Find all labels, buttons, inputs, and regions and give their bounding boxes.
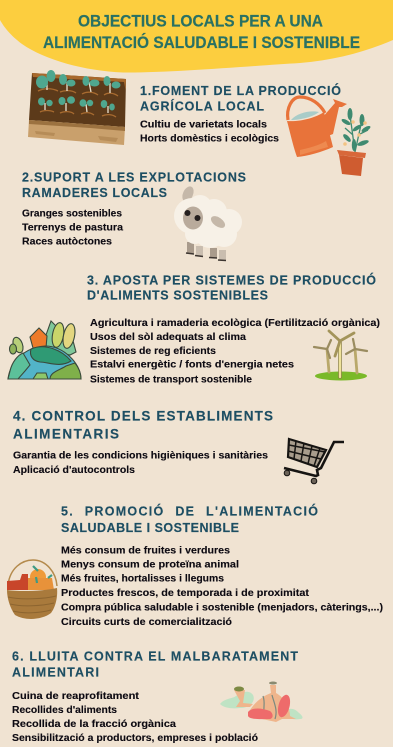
heading: section 3: D'ALIMENTS SOSTENIBLES <box>87 288 268 302</box>
heading: section 4 <box>13 409 273 442</box>
icon: globe with house and trees <box>8 321 81 379</box>
heading: section 2: 2.SUPORT A LES EXPLOTACIONS <box>22 171 246 185</box>
text: section 1 list: Horts domèstics i ecològics <box>140 134 279 145</box>
text: section 1 list <box>140 120 279 145</box>
text: section 2 list: Granges sostenibles <box>22 209 122 220</box>
text: section 5 list: Circuits curts de comercialització <box>61 617 232 628</box>
heading: section 5 <box>61 503 318 535</box>
text: section 5 list: Menys consum de proteïna animal <box>61 560 239 571</box>
icon: wind turbines <box>314 331 367 380</box>
text: section 4 list: Garantia de les condicions higièniques i sanitàries <box>13 451 268 462</box>
text: section 3 list: Agricultura i ramaderia ecològica (Fertilització orgànica) <box>90 318 380 329</box>
heading: section 6: 6. LLUITA CONTRA EL MALBARATAMENT <box>12 650 298 664</box>
heading: section 3: 3. APOSTA PER SISTEMES DE PRODUCCIÓ <box>87 273 376 288</box>
icon: shopping cart <box>284 439 344 484</box>
header banner <box>0 0 393 73</box>
text: section 5 list: Productes frescos, de temporada i de proximitat <box>61 588 310 599</box>
text: section 6 list: Recollides d'aliments <box>12 705 117 716</box>
heading: section 3 <box>87 273 376 302</box>
text: section 3 list: Sistemes de reg eficients <box>90 346 216 357</box>
heading: section 1: 1.FOMENT DE LA PRODUCCIÓ <box>140 83 341 98</box>
text: section 4 list: Aplicació d'autocontrols <box>13 465 135 476</box>
heading: section 6 <box>12 650 298 680</box>
heading: section 5: SALUDABLE I SOSTENIBLE <box>61 521 239 535</box>
text: section 1 list: Cultiu de varietats locals <box>140 120 267 130</box>
icon: fruit basket <box>7 560 57 619</box>
heading: section 2: RAMADERES LOCALS <box>22 186 167 200</box>
icon: soil plot with seedlings <box>28 70 126 145</box>
text: section 6 list <box>12 691 258 744</box>
heading: section 2 <box>22 171 246 200</box>
icon: sheep <box>174 185 242 260</box>
heading: section 6: ALIMENTARI <box>12 666 99 680</box>
icon: food waste <box>220 682 303 722</box>
heading: section 4: 4. CONTROL DELS ESTABLIMENTS <box>13 409 273 424</box>
heading: section 1 <box>140 83 341 114</box>
text: section 5 list: Compra pública saludable i sostenible (menjadors, càterings,...) <box>61 603 383 614</box>
title: OBJECTIUS LOCALS PER A UNA <box>78 12 323 30</box>
text: section 5 list: Més fruites, hortalisses i llegums <box>61 574 224 585</box>
heading: section 1: AGRÍCOLA LOCAL <box>140 98 264 114</box>
icon: potted plant <box>337 108 371 176</box>
title: ALIMENTACIÓ SALUDABLE I SOSTENIBLE <box>43 33 360 52</box>
text: section 6 list: Sensibilització a productors, empreses i població <box>12 733 258 744</box>
heading: section 4: ALIMENTARIS <box>13 427 119 442</box>
title <box>43 12 360 52</box>
heading: section 5: 5. PROMOCIÓ DE L'ALIMENTACIÓ <box>61 503 318 518</box>
text: section 3 list: Sistemes de transport sostenible <box>90 375 252 386</box>
text: section 2 list: Races autòctones <box>22 237 112 248</box>
text: section 3 list <box>90 318 380 386</box>
text: section 6 list: Cuina de reaprofitament <box>12 691 140 702</box>
text: section 2 list: Terrenys de pastura <box>22 223 123 234</box>
text: section 5 list <box>61 546 383 628</box>
text: section 3 list: Estalvi energètic / fonts d'energia netes <box>90 360 294 371</box>
text: section 3 list: Usos del sòl adequats al clima <box>90 332 246 343</box>
text: section 2 list <box>22 209 123 248</box>
text: section 4 list <box>13 451 268 476</box>
icon: watering can <box>287 97 347 157</box>
text: section 6 list: Recollida de la fracció orgànica <box>12 719 176 730</box>
text: section 5 list: Més consum de fruites i verdures <box>61 546 230 557</box>
